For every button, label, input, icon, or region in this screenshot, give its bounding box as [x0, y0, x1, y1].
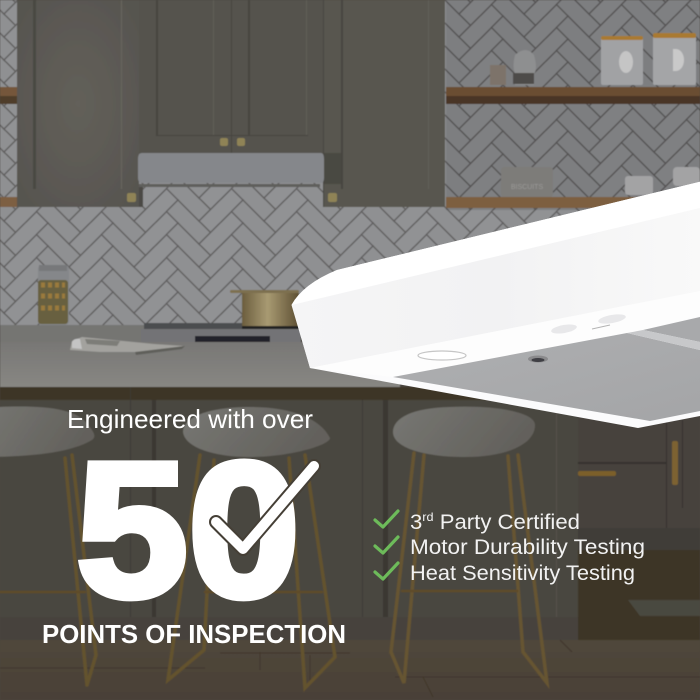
right lower cabinets	[578, 400, 700, 640]
stool right legs	[391, 453, 547, 683]
hood controls	[551, 313, 626, 335]
filter divider bar	[627, 330, 700, 350]
wood floor	[0, 640, 700, 700]
check icon 3	[375, 563, 398, 579]
cooktop	[141, 323, 301, 343]
right open shelves	[446, 87, 700, 208]
filter lamp	[528, 356, 548, 362]
item: 3rd party certified: Party Certified	[434, 511, 580, 534]
bar stools	[0, 453, 547, 688]
filter panel	[393, 333, 700, 421]
back countertop	[0, 325, 300, 343]
hood light button	[418, 351, 466, 360]
check icon 2	[375, 537, 398, 553]
check icon 1	[375, 511, 398, 527]
item: heat sensitivity testing: Heat Sensitivity Testing	[410, 562, 635, 585]
spice jar	[38, 265, 69, 325]
featured white range hood	[292, 182, 700, 428]
shaded wall over shelves	[446, 0, 700, 210]
bowls on shelf	[625, 167, 700, 195]
under-cabinet range hood in scene	[138, 153, 324, 183]
brass pot	[230, 290, 299, 329]
herringbone tile backsplash	[0, 0, 700, 330]
front countertop	[0, 342, 400, 387]
hood body	[292, 182, 700, 428]
left wall shelves	[0, 87, 17, 207]
checkmark over number	[216, 466, 314, 549]
heading: engineered with over: Engineered with over	[67, 404, 313, 434]
bread box	[501, 167, 553, 197]
hood lower band	[310, 291, 700, 377]
hood top bevel	[292, 182, 700, 305]
item: 3rd party certified: rd	[422, 510, 434, 524]
upper cabinets	[17, 0, 445, 207]
stool centre legs	[168, 455, 335, 688]
item: 3rd party certified: 3	[410, 511, 422, 534]
lower cabinets	[0, 387, 578, 640]
filter second section	[643, 317, 700, 342]
stool left legs	[0, 455, 96, 685]
certification list	[375, 510, 645, 585]
cabinet knobs	[127, 138, 337, 202]
hood front face	[292, 208, 700, 368]
big number 50: 50	[76, 422, 300, 637]
magazine	[70, 337, 185, 355]
bread box: BISCUITS	[511, 184, 543, 191]
stool seats	[0, 407, 535, 457]
small glassware on shelf	[490, 50, 536, 85]
caption: points of inspection: POINTS OF INSPECTION	[42, 621, 346, 649]
canisters	[601, 33, 696, 85]
item: motor durability testing: Motor Durability Testing	[410, 536, 645, 559]
